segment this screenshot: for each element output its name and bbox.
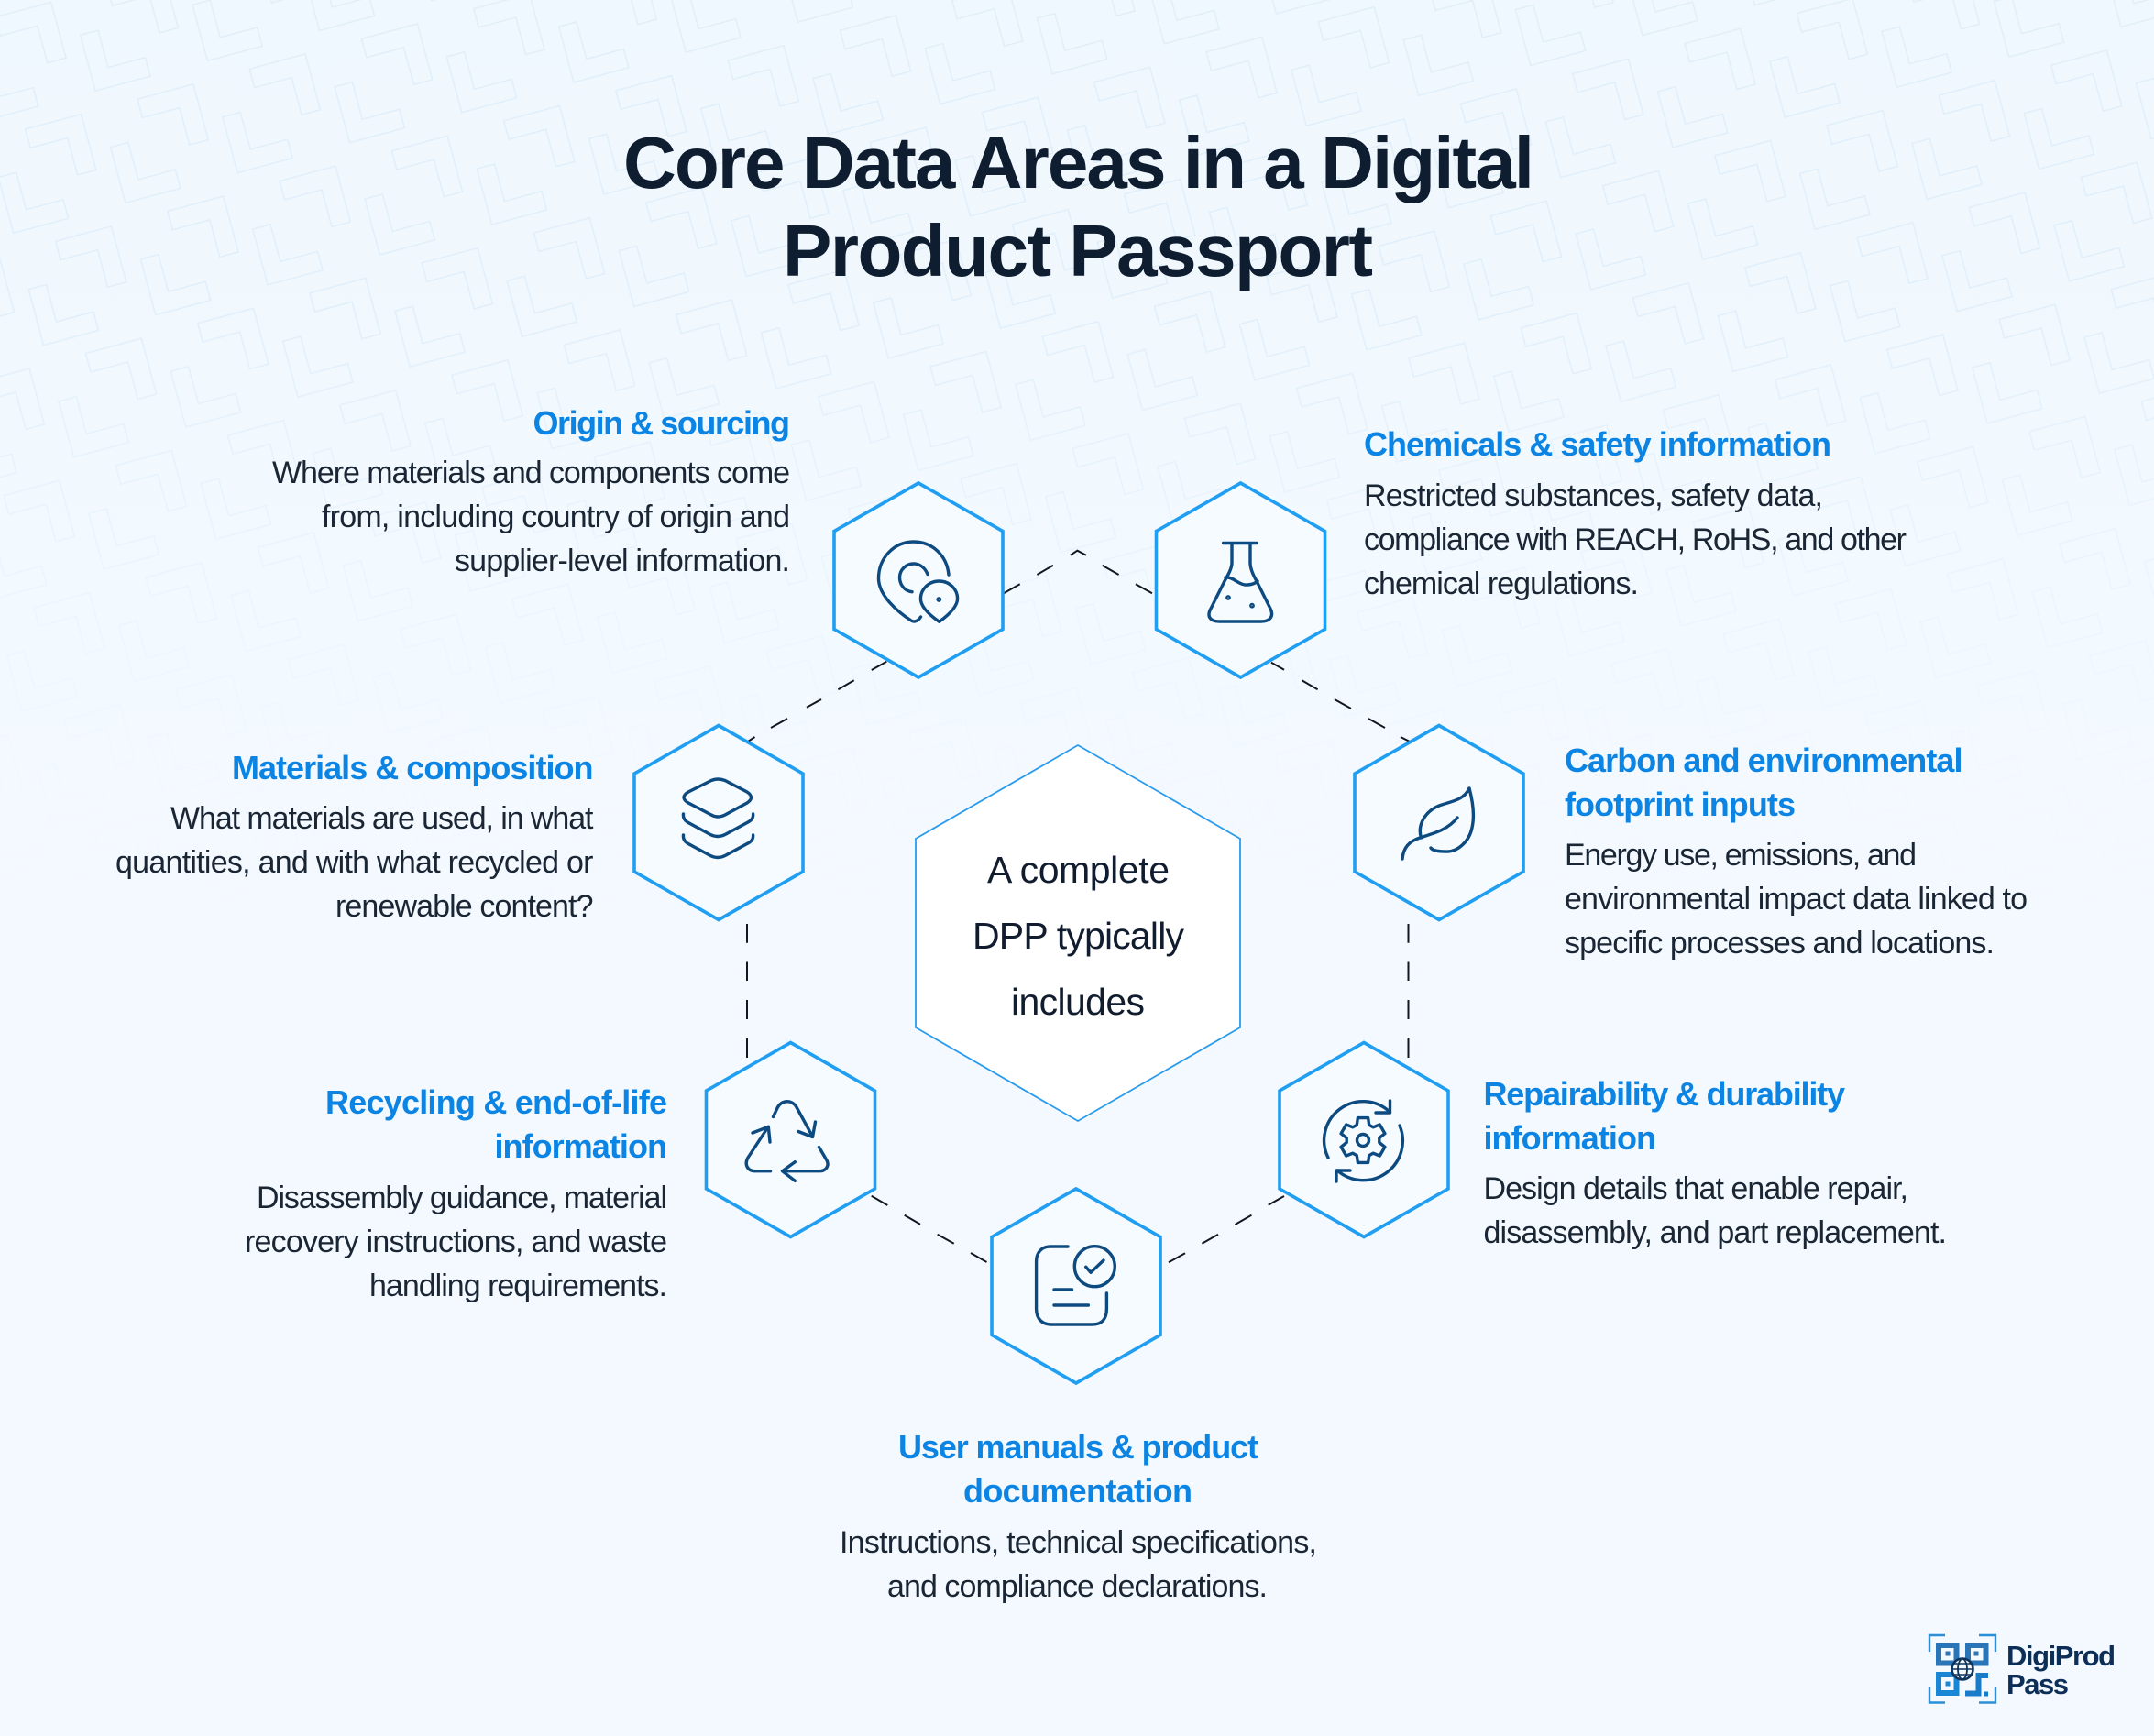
heading: user manuals — [898, 1428, 1258, 1510]
text: origin description: supplier-level information. — [455, 544, 790, 578]
icon: layers — [683, 779, 753, 858]
text: carbon description: specific processes and locations. — [1565, 926, 1995, 961]
heading: repairability: Repairability & durability — [1483, 1075, 1845, 1113]
text: repairability description: Design details that enable repair, — [1483, 1171, 1908, 1206]
heading: repairability: information — [1483, 1119, 1656, 1157]
text: recycling description: handling requirements. — [369, 1269, 667, 1303]
text: repairability description: disassembly, and part replacement. — [1483, 1215, 1947, 1250]
icon: gear with arrows — [1324, 1101, 1402, 1181]
icon: recycle arrows — [746, 1102, 828, 1181]
text: chemicals description: chemical regulations. — [1364, 566, 1639, 601]
text: materials description: What materials are used, in what — [170, 801, 594, 836]
text: user manuals description: and compliance declarations. — [887, 1569, 1268, 1604]
text: chemicals description — [1364, 478, 1907, 601]
dashed connector hexagon — [747, 551, 1410, 1262]
text: carbon description — [1565, 838, 2028, 961]
title: Product Passport — [783, 210, 1373, 291]
logo: DigiProd Pass: DigiProd — [2006, 1640, 2116, 1672]
text: materials description: quantities, and with what recycled or — [115, 845, 594, 880]
panel: chemicals & safety — [1157, 425, 1907, 677]
logo: DigiProd Pass: Pass — [2006, 1668, 2069, 1700]
panel: repairability & durability — [1280, 1043, 1947, 1250]
text: origin description — [272, 456, 790, 578]
icon: flask — [1209, 543, 1272, 621]
panel: recycling & end-of-life — [245, 1043, 874, 1303]
center hexagon: A complete DPP typically includes: includes — [1011, 981, 1145, 1023]
center hexagon: A complete DPP typically includes: DPP typically — [973, 915, 1184, 957]
heading: carbon — [1565, 742, 1963, 823]
heading: user manuals: User manuals & product — [898, 1428, 1258, 1466]
text: carbon description: environmental impact data linked to — [1565, 882, 2028, 917]
heading: recycling: Recycling & end-of-life — [325, 1083, 667, 1121]
icon: origin location pin — [878, 542, 958, 621]
heading: origin & sourcing: Origin & sourcing — [533, 404, 790, 442]
heading: recycling: information — [495, 1127, 667, 1165]
text: materials description — [115, 801, 594, 924]
heading: repairability — [1483, 1075, 1845, 1157]
logo: DigiProd Pass — [1929, 1635, 2116, 1703]
heading: recycling — [325, 1083, 667, 1165]
text: recycling description — [245, 1181, 667, 1303]
text: recycling description: recovery instructions, and waste — [245, 1225, 667, 1259]
heading: materials: Materials & composition — [232, 749, 594, 786]
icon: leaf — [1402, 788, 1473, 859]
text: repairability description — [1483, 1171, 1947, 1250]
icon: document with check — [1037, 1247, 1115, 1324]
heading: carbon: footprint inputs — [1565, 786, 1796, 823]
center hexagon: A complete DPP typically includes — [916, 745, 1240, 1121]
title — [623, 122, 1534, 291]
title: Core Data Areas in a Digital — [623, 122, 1534, 203]
heading: carbon: Carbon and environmental — [1565, 742, 1963, 779]
panel: materials & composition — [115, 726, 803, 924]
text: materials description: renewable content? — [335, 889, 594, 924]
text: chemicals description: compliance with REACH, RoHS, and other — [1364, 522, 1907, 557]
text: origin description: from, including country of origin and — [322, 500, 790, 534]
heading: chemicals: Chemicals & safety information — [1364, 425, 1831, 463]
icon: QR code with globe — [1929, 1635, 1995, 1703]
text: recycling description: Disassembly guidance, material — [257, 1181, 667, 1215]
panel: carbon and environmental footprint — [1355, 726, 2028, 961]
text: chemicals description: Restricted substances, safety data, — [1364, 478, 1823, 513]
center hexagon: A complete DPP typically includes: A complete — [987, 849, 1170, 891]
text: origin description: Where materials and components come — [272, 456, 790, 490]
text: carbon description: Energy use, emissions, and — [1565, 838, 1917, 873]
panel: user manuals & documentation — [840, 1189, 1317, 1604]
heading: user manuals: documentation — [963, 1472, 1192, 1510]
panel: origin & sourcing — [272, 404, 1003, 677]
text: user manuals description: Instructions, technical specifications, — [840, 1525, 1317, 1560]
text: user manuals description — [840, 1525, 1317, 1604]
